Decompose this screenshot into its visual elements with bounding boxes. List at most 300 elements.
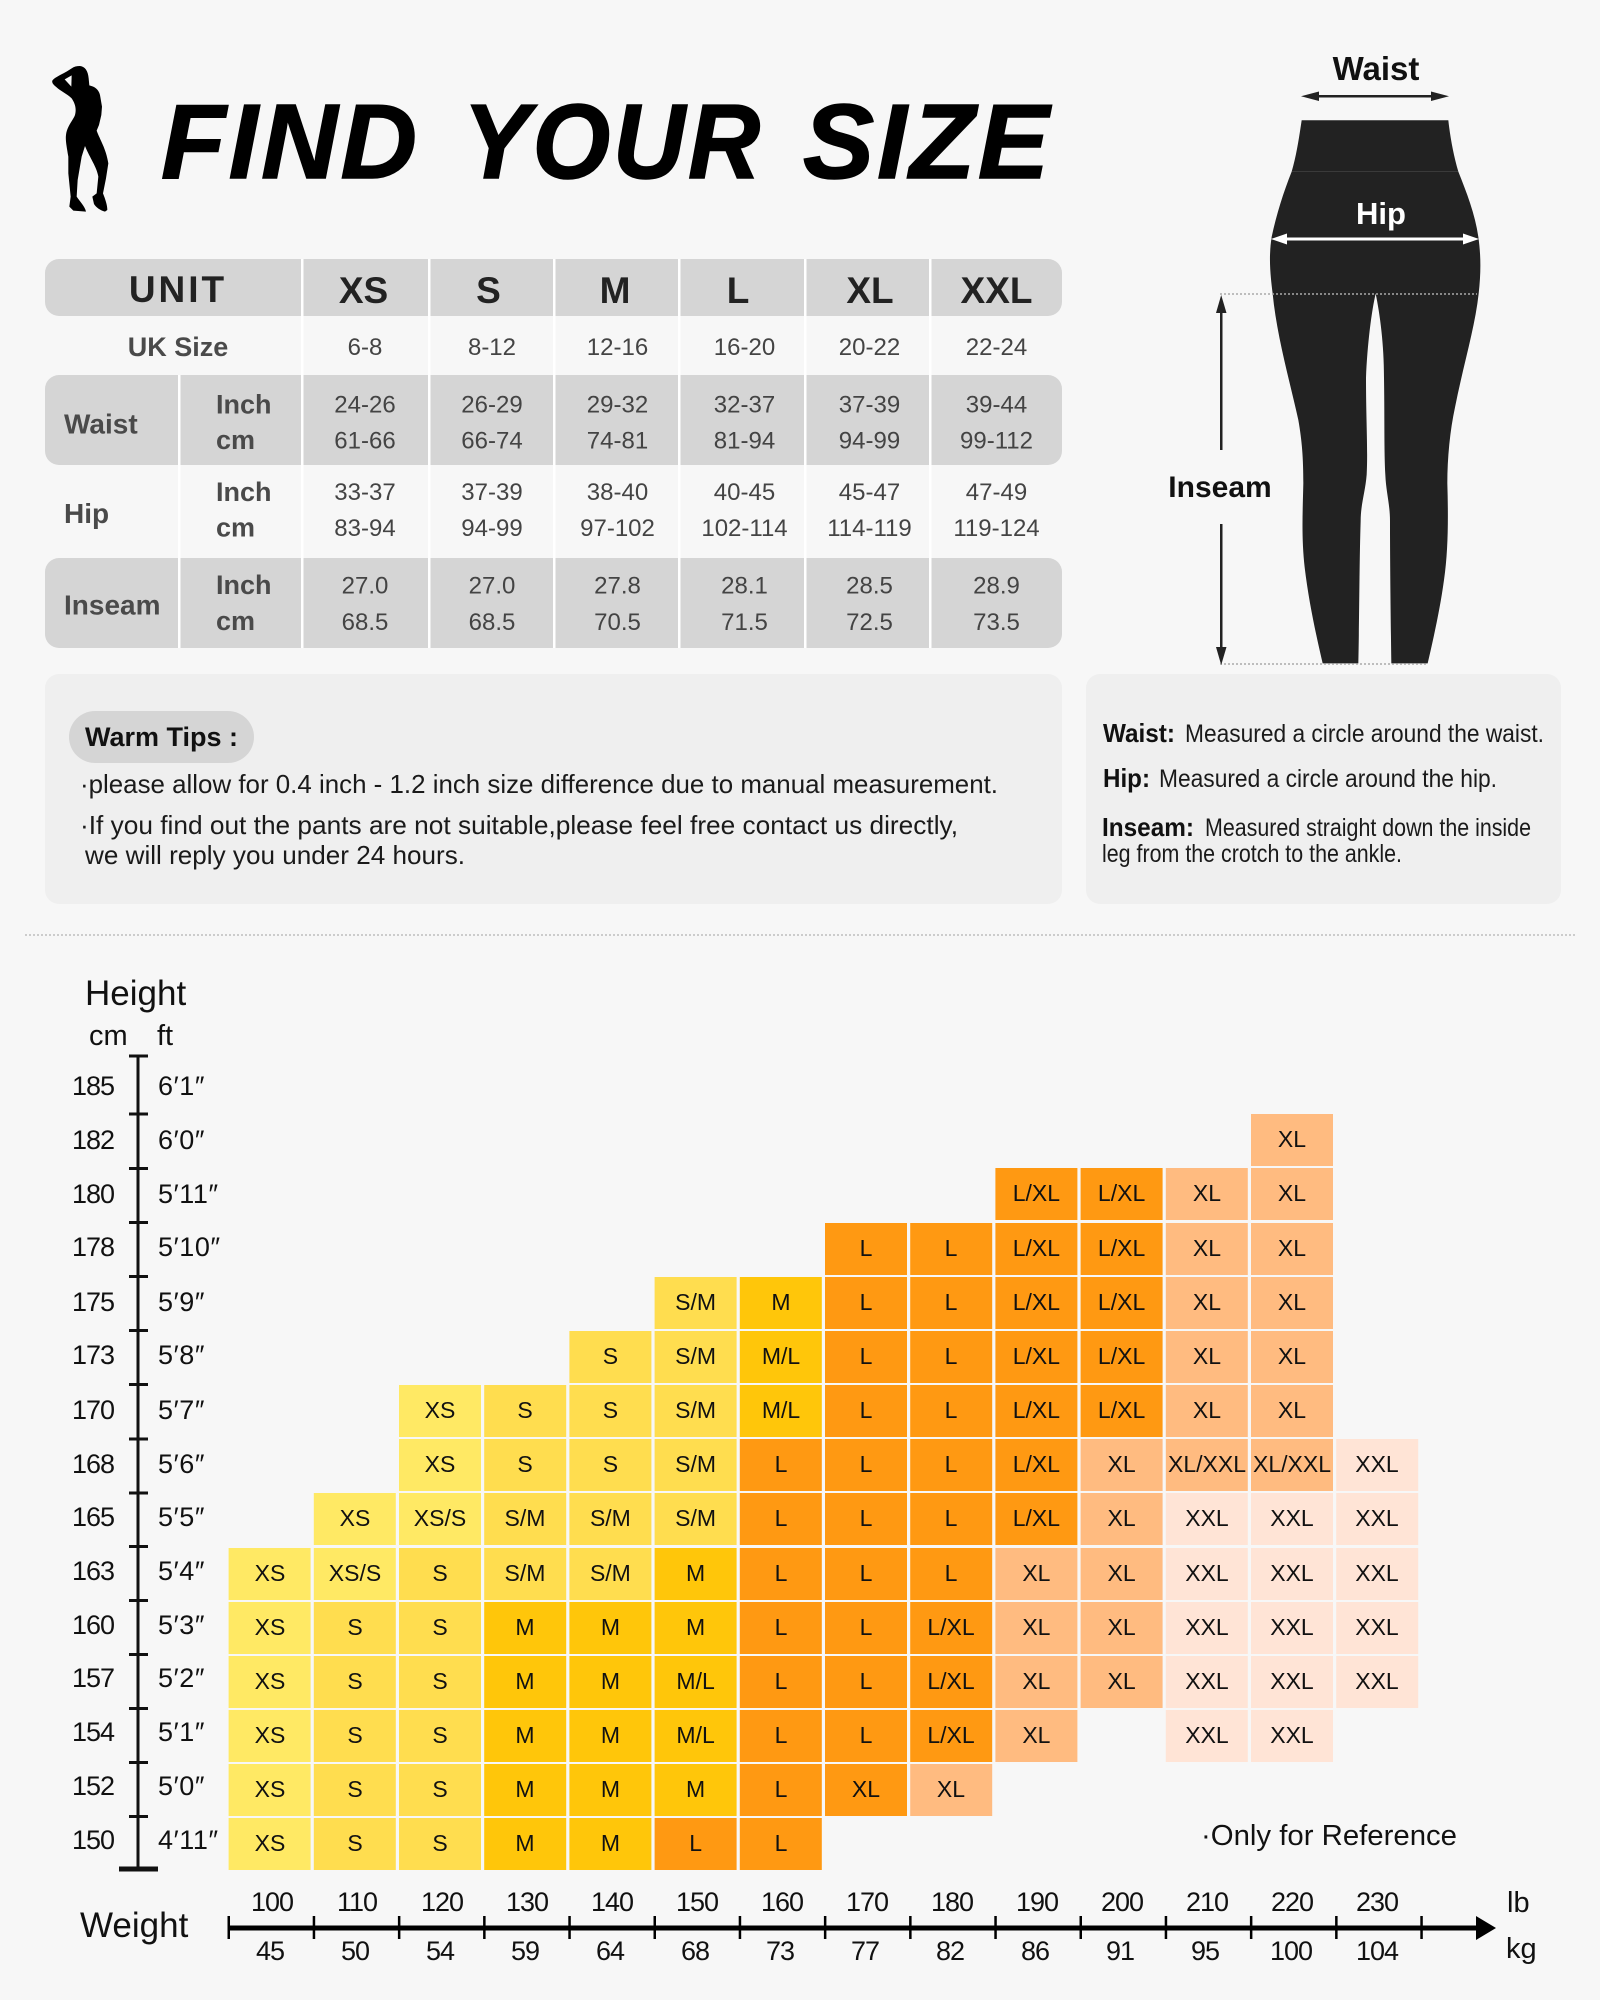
hip row: 38-40: [587, 479, 648, 506]
row: 157 cm: XXL: [1355, 1668, 1399, 1694]
row: 163 cm: S/M: [505, 1560, 545, 1586]
row: 154 cm: XL: [1022, 1722, 1051, 1748]
row: 175 cm: XL: [1278, 1289, 1306, 1315]
hip row: Inch: [216, 477, 272, 507]
size table: [45, 259, 1062, 648]
inseam row: 68.5: [342, 609, 388, 636]
waist row: 66-74: [461, 428, 523, 455]
definition: hip: Hip:: [1103, 763, 1150, 793]
pound labels: 150: [676, 1887, 718, 1917]
row: 173 cm: L/XL: [1098, 1343, 1145, 1369]
row: 157 cm: XL: [1108, 1668, 1136, 1694]
panel: warm tips: [45, 674, 1062, 904]
row: 175 cm: L/XL: [1013, 1289, 1060, 1315]
table band: waist: [45, 375, 1062, 465]
height labels: 5′6″: [158, 1449, 205, 1479]
pound labels: 180: [931, 1887, 973, 1917]
row: 157 cm: XL: [1022, 1668, 1051, 1694]
height labels: 163: [72, 1556, 114, 1586]
row: 165 cm: XS: [340, 1505, 370, 1531]
height axis: [72, 974, 221, 1872]
arrow: inseam upper: [1216, 295, 1226, 450]
row: 165 cm: S/M: [675, 1505, 716, 1531]
row: 180 cm: XL: [1193, 1180, 1221, 1206]
row: 165 cm: XXL: [1355, 1505, 1399, 1531]
pound labels: 100: [251, 1887, 293, 1917]
row: 152 cm: [229, 1764, 992, 1816]
row: 163 cm: XXL: [1270, 1560, 1314, 1586]
height labels: 154: [72, 1717, 115, 1747]
row: 170 cm: XL: [1193, 1397, 1221, 1423]
weight axis: [80, 1887, 1537, 1966]
row: 154 cm: [229, 1710, 1333, 1762]
row: 152 cm: S: [432, 1776, 448, 1802]
size grid: [229, 1114, 1418, 1870]
row: 160 cm: S: [432, 1614, 448, 1640]
waist row: 32-37: [714, 392, 775, 418]
definition: inseam: Measured straight down the inside: [1205, 814, 1531, 842]
kilogram labels: 82: [936, 1936, 964, 1966]
UK size row: [128, 332, 1027, 362]
heading: Weight: Weight: [80, 1906, 189, 1945]
row: 168 cm: XL/XXL: [1168, 1451, 1246, 1477]
height labels: 5′7″: [158, 1395, 205, 1425]
height labels: [72, 1071, 221, 1855]
definition: inseam: Inseam:: [1102, 812, 1194, 842]
row: 150 cm: S: [347, 1830, 363, 1856]
row: 160 cm: XXL: [1270, 1614, 1314, 1640]
pound labels: 140: [591, 1887, 633, 1917]
inseam row: 28.1: [721, 572, 768, 600]
icon: woman silhouette: [52, 66, 108, 212]
row: 160 cm: S: [347, 1614, 363, 1640]
row: 170 cm: S: [603, 1397, 618, 1423]
kilogram labels: 104: [1356, 1936, 1399, 1966]
row: 173 cm: L/XL: [1013, 1343, 1060, 1369]
row: 175 cm: L: [945, 1289, 958, 1315]
row: 170 cm: M/L: [762, 1397, 800, 1423]
label: Inseam: Inseam: [1168, 471, 1272, 504]
title: [161, 83, 1052, 201]
row: 173 cm: L: [945, 1343, 958, 1369]
row: 157 cm: L: [860, 1668, 873, 1694]
row: 163 cm: XXL: [1355, 1560, 1399, 1586]
kilogram labels: 73: [766, 1936, 794, 1966]
kilogram labels: 54: [426, 1936, 455, 1966]
row: 168 cm: XL: [1108, 1451, 1136, 1477]
row: 160 cm: M: [686, 1614, 705, 1640]
row: 154 cm: S: [432, 1722, 448, 1748]
waist row: 29-32: [587, 392, 648, 418]
row: 152 cm: M: [601, 1776, 620, 1802]
row: 160 cm: XXL: [1185, 1614, 1229, 1640]
height labels: 182: [72, 1125, 114, 1155]
kilogram labels: 77: [851, 1936, 879, 1966]
hip row: 47-49: [966, 479, 1027, 506]
row: 154 cm: M/L: [676, 1722, 715, 1748]
row: 163 cm: XXL: [1185, 1560, 1229, 1586]
row: 154 cm: L: [860, 1722, 873, 1748]
row: 163 cm: XS: [255, 1560, 285, 1586]
table band: header: [45, 259, 1062, 316]
row: 150 cm: XS: [255, 1830, 285, 1856]
row: 178 cm: L/XL: [1098, 1235, 1145, 1261]
row: 178 cm: L/XL: [1013, 1235, 1060, 1261]
height labels: 5′0″: [158, 1771, 205, 1801]
waist row: 61-66: [334, 428, 396, 455]
tip two: ·If you find out the pants are not suitable,please feel free contact us directly,: [80, 810, 958, 840]
height labels: 150: [72, 1825, 114, 1855]
inseam row: [64, 570, 1020, 636]
UK size row: 12-16: [587, 334, 648, 361]
row: 168 cm: XL/XXL: [1253, 1451, 1331, 1477]
hip row: 94-99: [461, 515, 523, 542]
height labels: 6′1″: [158, 1071, 205, 1101]
height labels: 178: [72, 1232, 114, 1262]
pound labels: 210: [1186, 1887, 1228, 1917]
row: 165 cm: S/M: [505, 1505, 545, 1531]
hip row: 83-94: [334, 515, 396, 542]
arrow: waist width: [1301, 92, 1449, 101]
row: 160 cm: L: [860, 1614, 873, 1640]
hip row: 33-37: [334, 479, 396, 506]
waist row: [64, 390, 1033, 455]
hip row: 37-39: [461, 479, 523, 506]
table band: inseam: [45, 558, 1062, 648]
pound labels: 170: [846, 1887, 888, 1917]
row: 170 cm: S/M: [675, 1397, 716, 1423]
dotted guide: crotch: [1220, 293, 1477, 295]
row: 173 cm: [569, 1331, 1333, 1383]
row: 173 cm: L: [860, 1343, 873, 1369]
row: 165 cm: XXL: [1185, 1505, 1229, 1531]
UK size row: UK Size: [128, 332, 228, 362]
row: 165 cm: S/M: [590, 1505, 631, 1531]
axis line: [119, 1054, 158, 1872]
badge: warm tips: [69, 711, 254, 763]
table header row: [129, 269, 1032, 311]
leggings silhouette: [1270, 120, 1480, 663]
row: 150 cm: M: [601, 1830, 620, 1856]
row: 168 cm: L: [945, 1451, 958, 1477]
UK size row: 8-12: [468, 334, 516, 361]
row: 168 cm: S: [603, 1451, 618, 1477]
row: 154 cm: XXL: [1270, 1722, 1314, 1748]
pound labels: [251, 1887, 1398, 1917]
row: 178 cm: L: [945, 1235, 958, 1261]
row: 168 cm: S: [517, 1451, 533, 1477]
row: 180 cm: [995, 1168, 1333, 1220]
row: 180 cm: L/XL: [1098, 1180, 1145, 1206]
inseam row: 28.9: [973, 572, 1020, 600]
row: 157 cm: L/XL: [927, 1668, 975, 1694]
row: 175 cm: [655, 1277, 1333, 1329]
waist row: Inch: [216, 390, 272, 420]
height labels: 152: [72, 1771, 114, 1801]
waist row: 26-29: [461, 392, 523, 418]
height labels: 6′0″: [158, 1125, 205, 1155]
hip row: [64, 477, 1040, 542]
row: 182 cm: [1251, 1114, 1333, 1166]
height labels: 5′11″: [158, 1179, 219, 1209]
inseam row: 70.5: [594, 609, 641, 636]
row: 160 cm: L: [775, 1614, 788, 1640]
waist row: Waist: [64, 408, 138, 440]
row: 160 cm: XL: [1108, 1614, 1136, 1640]
definition: hip: Measured a circle around the hip.: [1159, 765, 1497, 793]
height labels: 5′4″: [158, 1556, 205, 1586]
pound labels: 220: [1271, 1887, 1313, 1917]
arrow: hip width: [1271, 234, 1479, 244]
height labels: 168: [72, 1449, 114, 1479]
hip row: 119-124: [953, 515, 1040, 542]
row: 180 cm: XL: [1278, 1180, 1306, 1206]
row: 157 cm: XXL: [1270, 1668, 1314, 1694]
row: 157 cm: M: [601, 1668, 620, 1694]
waist row: 39-44: [966, 392, 1027, 418]
height labels: 5′3″: [158, 1610, 205, 1640]
row: 173 cm: S: [603, 1343, 618, 1369]
row: 152 cm: S: [347, 1776, 363, 1802]
waist row: cm: [216, 425, 255, 455]
height labels: 5′8″: [158, 1340, 205, 1370]
row: 152 cm: XS: [255, 1776, 285, 1802]
row: 163 cm: S: [432, 1560, 448, 1586]
inseam row: cm: [216, 606, 255, 636]
hip row: cm: [216, 512, 255, 542]
table header row: XS: [339, 270, 388, 311]
row: 154 cm: L: [775, 1722, 788, 1748]
inseam row: 71.5: [721, 609, 768, 636]
row: 160 cm: [229, 1602, 1418, 1654]
height labels: 170: [72, 1395, 114, 1425]
axis arrow: [228, 1916, 1496, 1940]
row: 173 cm: M/L: [762, 1343, 800, 1369]
row: 154 cm: M: [515, 1722, 535, 1748]
title: SIZE: [803, 83, 1052, 201]
row: 165 cm: L/XL: [1013, 1505, 1060, 1531]
row: 163 cm: [229, 1548, 1418, 1600]
tip one: ·please allow for 0.4 inch - 1.2 inch size difference due to manual measurement.: [80, 769, 998, 799]
row: 152 cm: M: [515, 1776, 535, 1802]
hip row: 114-119: [827, 515, 912, 542]
pound labels: 110: [337, 1887, 377, 1917]
row: 175 cm: M: [771, 1289, 791, 1315]
row: 170 cm: XS: [425, 1397, 455, 1423]
definition: inseam: [1102, 812, 1531, 868]
row: 160 cm: XXL: [1355, 1614, 1399, 1640]
row: 157 cm: L: [775, 1668, 788, 1694]
row: 165 cm: XS/S: [414, 1505, 466, 1531]
waist row: 37-39: [839, 392, 900, 418]
row: 175 cm: L/XL: [1098, 1289, 1145, 1315]
row: 182 cm: XL: [1278, 1126, 1306, 1152]
kilogram labels: 95: [1191, 1936, 1219, 1966]
row: 168 cm: XS: [425, 1451, 455, 1477]
UK size row: 6-8: [348, 334, 382, 361]
row: 157 cm: M: [515, 1668, 535, 1694]
tip two: [80, 810, 958, 870]
row: 163 cm: XL: [1022, 1560, 1051, 1586]
height labels: 160: [72, 1610, 114, 1640]
kilogram labels: 50: [341, 1936, 369, 1966]
inseam row: 27.8: [594, 572, 641, 600]
arrow: inseam lower: [1216, 524, 1226, 665]
kilogram labels: 91: [1106, 1936, 1134, 1966]
hip row: 45-47: [839, 479, 900, 506]
dotted guide: ankle: [1220, 663, 1427, 665]
pound labels: 190: [1016, 1887, 1058, 1917]
hip row: Hip: [64, 498, 109, 529]
inseam row: Inseam: [64, 590, 160, 620]
row: 157 cm: S: [347, 1668, 363, 1694]
row: 175 cm: L: [860, 1289, 873, 1315]
row: 168 cm: [399, 1439, 1418, 1491]
row: 154 cm: L/XL: [927, 1722, 975, 1748]
row: 163 cm: XS/S: [329, 1560, 381, 1586]
height labels: 165: [72, 1502, 114, 1532]
row: 157 cm: XXL: [1185, 1668, 1229, 1694]
kilogram labels: 86: [1021, 1936, 1049, 1966]
waist row: 74-81: [587, 428, 648, 455]
row: 160 cm: M: [515, 1614, 535, 1640]
definition: waist: Measured a circle around the waist.: [1185, 720, 1544, 748]
row: 178 cm: L: [860, 1235, 873, 1261]
row: 160 cm: XL: [1022, 1614, 1051, 1640]
hip row: 97-102: [580, 515, 655, 542]
UK size row: 16-20: [714, 334, 775, 361]
row: 160 cm: M: [601, 1614, 620, 1640]
title: FIND: [161, 83, 420, 201]
height labels: 173: [72, 1340, 114, 1370]
height labels: 5′10″: [158, 1232, 221, 1262]
row: 165 cm: L: [860, 1505, 873, 1531]
table header row: XXL: [961, 270, 1032, 311]
kilogram labels: 100: [1270, 1936, 1312, 1966]
row: 163 cm: M: [686, 1560, 705, 1586]
unit: kg: kg: [1506, 1933, 1537, 1965]
pound labels: 230: [1356, 1887, 1398, 1917]
inseam row: 72.5: [846, 609, 893, 636]
row: 168 cm: L: [860, 1451, 873, 1477]
inseam row: 27.0: [342, 572, 388, 600]
hip row: 102-114: [701, 515, 788, 542]
height labels: 185: [72, 1071, 114, 1101]
leggings measurement diagram: [1168, 50, 1480, 665]
hip row: 40-45: [714, 479, 775, 506]
height labels: 5′1″: [158, 1717, 205, 1747]
row: 178 cm: XL: [1278, 1235, 1306, 1261]
table header row: XL: [846, 270, 894, 311]
height labels: 180: [72, 1179, 114, 1209]
waist row: 24-26: [334, 392, 396, 418]
row: 175 cm: XL: [1193, 1289, 1221, 1315]
row: 173 cm: XL: [1278, 1343, 1306, 1369]
row: 165 cm: XL: [1108, 1505, 1136, 1531]
row: 157 cm: S: [432, 1668, 448, 1694]
row: 157 cm: M/L: [676, 1668, 715, 1694]
row: 165 cm: XXL: [1270, 1505, 1314, 1531]
definition: inseam: leg from the crotch to the ankle.: [1102, 840, 1402, 868]
kilogram labels: 45: [256, 1936, 284, 1966]
table header row: S: [476, 270, 501, 311]
row: 163 cm: L: [860, 1560, 873, 1586]
inseam row: 68.5: [469, 609, 515, 636]
row: 157 cm: XS: [255, 1668, 285, 1694]
row: 165 cm: [314, 1493, 1418, 1545]
inseam row: 27.0: [469, 572, 515, 600]
table header row: L: [727, 270, 749, 311]
row: 163 cm: L: [945, 1560, 958, 1586]
waist row: 81-94: [714, 428, 775, 455]
waist row: 99-112: [960, 428, 1033, 455]
row: 173 cm: S/M: [675, 1343, 716, 1369]
note: only for reference: ·Only for Reference: [1201, 1820, 1457, 1852]
pound labels: 120: [421, 1887, 463, 1917]
height labels: 5′2″: [158, 1663, 205, 1693]
panel: measurement definitions: [1086, 674, 1561, 904]
height labels: 4′11″: [158, 1825, 219, 1855]
row: 170 cm: XL: [1278, 1397, 1306, 1423]
row: 152 cm: M: [686, 1776, 705, 1802]
unit: lb: lb: [1507, 1887, 1530, 1919]
row: 154 cm: M: [601, 1722, 620, 1748]
row: 170 cm: [399, 1385, 1333, 1437]
tip two: we will reply you under 24 hours.: [84, 840, 465, 870]
inseam row: Inch: [216, 570, 272, 600]
row: 154 cm: XXL: [1185, 1722, 1229, 1748]
inseam row: 28.5: [846, 572, 893, 600]
row: 180 cm: L/XL: [1013, 1180, 1060, 1206]
row: 170 cm: L/XL: [1098, 1397, 1145, 1423]
row: 170 cm: S: [517, 1397, 533, 1423]
kilogram labels: [256, 1936, 1399, 1966]
row: 175 cm: S/M: [675, 1289, 716, 1315]
row: 168 cm: L/XL: [1013, 1451, 1060, 1477]
row: 163 cm: XL: [1108, 1560, 1136, 1586]
row: 152 cm: XL: [852, 1776, 880, 1802]
row: 170 cm: L: [945, 1397, 958, 1423]
UK size row: 22-24: [966, 334, 1027, 361]
label: Hip: Hip: [1356, 196, 1406, 231]
title: YOUR: [463, 83, 763, 201]
height labels: 175: [72, 1287, 114, 1317]
height labels: 157: [72, 1663, 114, 1693]
row: 152 cm: L: [775, 1776, 788, 1802]
unit: ft: ft: [157, 1020, 173, 1052]
row: 157 cm: [229, 1656, 1418, 1708]
row: 154 cm: XS: [255, 1722, 285, 1748]
row: 150 cm: L: [689, 1830, 702, 1856]
kilogram labels: 64: [596, 1936, 625, 1966]
badge: warm tips: Warm Tips :: [85, 722, 238, 752]
heading: Height: Height: [85, 974, 186, 1013]
row: 163 cm: S/M: [590, 1560, 631, 1586]
row: 150 cm: [229, 1818, 822, 1870]
row: 150 cm: L: [775, 1830, 788, 1856]
kilogram labels: 59: [511, 1936, 539, 1966]
row: 160 cm: XS: [255, 1614, 285, 1640]
height labels: 5′5″: [158, 1502, 205, 1532]
row: 173 cm: XL: [1193, 1343, 1221, 1369]
pound labels: 130: [506, 1887, 548, 1917]
row: 163 cm: L: [775, 1560, 788, 1586]
height labels: 5′9″: [158, 1287, 205, 1317]
row: 154 cm: S: [347, 1722, 363, 1748]
definition: waist: Waist:: [1103, 718, 1175, 748]
row: 165 cm: L: [775, 1505, 788, 1531]
row: 150 cm: M: [515, 1830, 535, 1856]
